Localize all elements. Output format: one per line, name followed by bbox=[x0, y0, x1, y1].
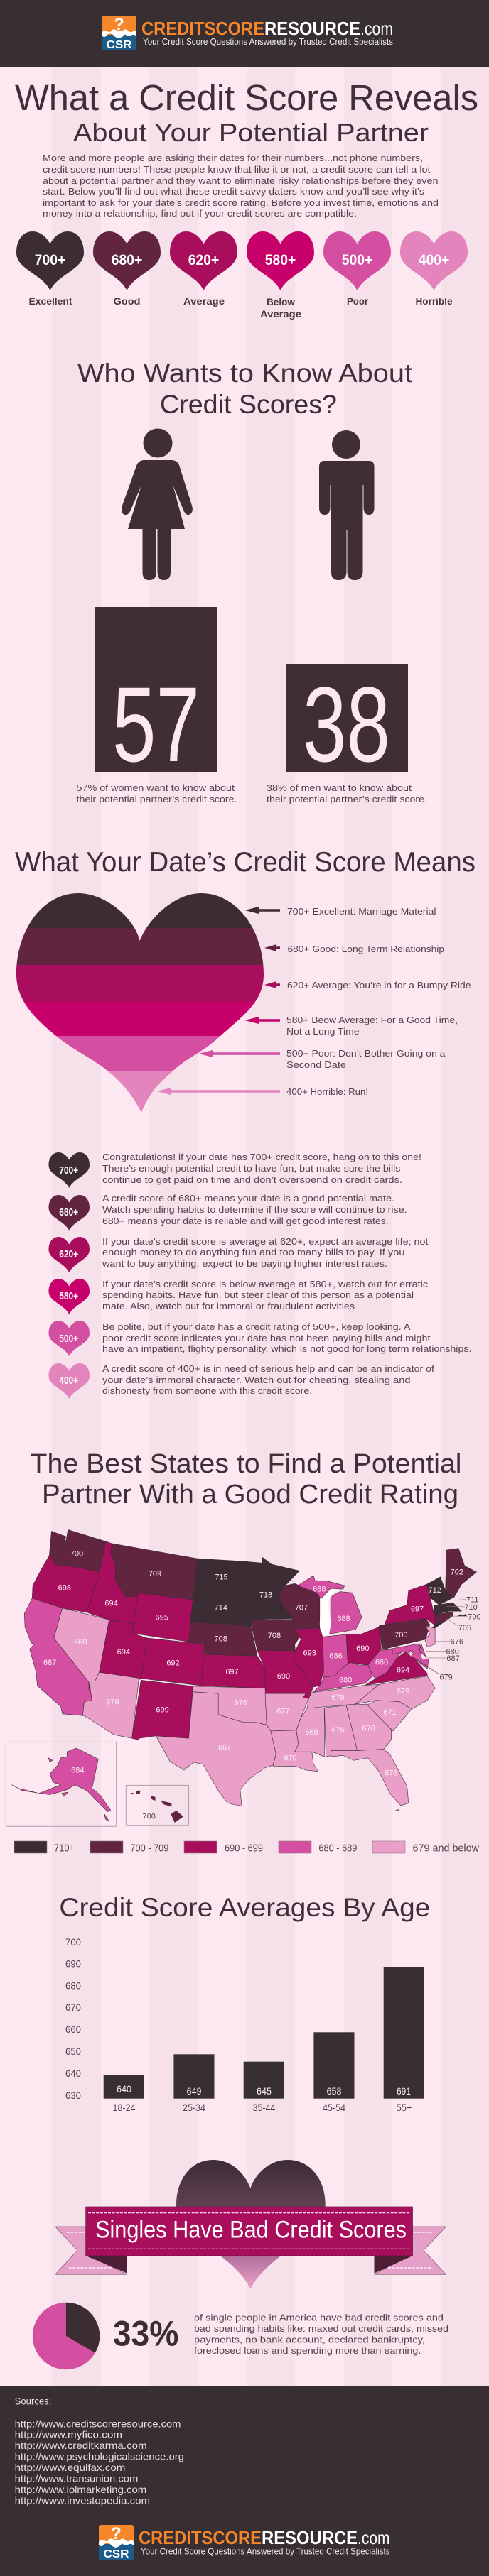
map value labels: 709 bbox=[149, 1570, 161, 1578]
header banner with logo: .com bbox=[360, 18, 393, 39]
map value labels: 700 bbox=[468, 1612, 481, 1621]
age labels: 35-44 bbox=[253, 2102, 276, 2113]
explanation 700+: Congratulations! if your date has 700+ credit score, hang on to this one! bbox=[102, 1152, 421, 1162]
map value labels: 680 bbox=[375, 1658, 388, 1666]
map value labels: 700 bbox=[394, 1631, 407, 1639]
bar values: 649 bbox=[186, 2085, 202, 2097]
map value labels: 676 bbox=[235, 1699, 247, 1708]
heart: 680+ Good: 680+ bbox=[112, 252, 142, 268]
map legend: 680 - 689 bbox=[318, 1842, 357, 1855]
y axis labels: 630 bbox=[65, 2090, 81, 2101]
map value labels: 677 bbox=[276, 1708, 290, 1716]
map value labels: 714 bbox=[215, 1604, 227, 1612]
explanation 580+ bbox=[48, 1279, 429, 1314]
map legend: 690 - 699 bbox=[225, 1842, 263, 1855]
explanation 620+: If your date’s credit score is average at 620+, expect an average life; not bbox=[102, 1236, 429, 1247]
caption: women: their potential partner’s credit score. bbox=[77, 794, 237, 804]
intro text: about a potential partner and they want to eliminate risky relationships before they even bbox=[43, 175, 438, 186]
explanation 700+ bbox=[48, 1152, 421, 1188]
arrow: 400 bbox=[157, 1088, 280, 1095]
map value labels: 708 bbox=[268, 1632, 281, 1640]
map value labels bbox=[43, 1549, 481, 1821]
explanation 680+ bbox=[48, 1193, 407, 1230]
explanation 700+: continue to get paid on time and don’t overspend on credit cards. bbox=[102, 1174, 402, 1185]
explanation 580+: spending habits. Have fun, but steer clear of this person as a potential bbox=[102, 1289, 414, 1300]
map value labels: 688 bbox=[313, 1585, 326, 1593]
age labels: 18-24 bbox=[112, 2102, 136, 2113]
map value labels: 692 bbox=[166, 1659, 180, 1667]
map value labels: 680 bbox=[446, 1647, 459, 1656]
explanation 700+: There’s enough potential credit to have fun, but make sure the bills bbox=[102, 1163, 401, 1174]
intro text: start. Below you’ll find out what these credit savvy daters know and you’ll see why it’s bbox=[43, 186, 425, 197]
ribbon right fold bbox=[374, 2256, 412, 2274]
ribbon left tail bbox=[55, 2227, 127, 2274]
bar: 57 percent women: 57 bbox=[112, 665, 200, 784]
explanation 580+: 580+ bbox=[59, 1291, 78, 1302]
map value labels: 690 bbox=[277, 1672, 290, 1681]
caption: women bbox=[77, 782, 237, 804]
map value labels: 676 bbox=[106, 1698, 119, 1707]
map value labels: 660 bbox=[74, 1638, 87, 1647]
intro text: More and more people are asking their dates for their numbers...not phone numbers, bbox=[43, 153, 423, 163]
age labels: 55+ bbox=[397, 2102, 412, 2113]
bar values: 645 bbox=[257, 2085, 272, 2097]
age labels: 25-34 bbox=[183, 2102, 205, 2113]
sources list: http://www.transunion.com bbox=[15, 2473, 138, 2484]
intro text bbox=[43, 153, 439, 219]
stat text: of single people in America have bad credit scores and bbox=[194, 2312, 444, 2323]
explanation 680+: 680+ bbox=[59, 1207, 78, 1218]
map value labels: 712 bbox=[429, 1586, 441, 1595]
header banner with logo: CSR bbox=[107, 39, 132, 51]
bar chart: scores by age bbox=[65, 1936, 424, 2113]
ribbon stitching bbox=[67, 2213, 432, 2268]
map value labels: 700 bbox=[143, 1812, 156, 1821]
sources list: http://www.creditscoreresource.com bbox=[15, 2418, 181, 2429]
heart legend labels: 680+ Good: Long Term Relationship bbox=[287, 944, 444, 954]
big striped heart bbox=[16, 893, 264, 1113]
score hearts row bbox=[16, 231, 468, 320]
map value labels: 679 bbox=[439, 1673, 453, 1681]
heart legend labels: 400+ Horrible: Run! bbox=[286, 1086, 368, 1097]
footer logo: RESOURCE bbox=[262, 2527, 358, 2548]
icon: woman bbox=[122, 429, 193, 580]
map value labels: 702 bbox=[451, 1568, 463, 1576]
caption: men bbox=[267, 782, 427, 804]
map value labels: 688 bbox=[337, 1615, 350, 1623]
y axis labels: 690 bbox=[65, 1958, 81, 1970]
map value labels: 708 bbox=[215, 1635, 227, 1644]
y axis labels: 680 bbox=[65, 1980, 81, 1992]
heart: 400+ Horrible: Horrible bbox=[415, 295, 453, 307]
explanation 500+: 500+ bbox=[59, 1333, 78, 1345]
map value labels: 694 bbox=[117, 1648, 130, 1657]
explanation 500+: poor credit score indicates your date has not been paying bills and might bbox=[102, 1333, 431, 1343]
heading: averages by age: Credit Score Averages By Age bbox=[59, 1893, 430, 1922]
heart: 620+ Average: 620+ bbox=[188, 252, 219, 268]
explanation 500+: Be polite, but if your date has a credit rating of 500+, keep looking. A bbox=[102, 1321, 411, 1332]
ribbon right tail bbox=[374, 2227, 446, 2274]
map value labels: 715 bbox=[215, 1573, 228, 1582]
sources list: http://www.myfico.com bbox=[15, 2428, 122, 2440]
explanation 400+ bbox=[48, 1363, 434, 1399]
heart: 680+ Good: Good bbox=[114, 295, 141, 307]
bar values: 691 bbox=[397, 2085, 411, 2097]
age labels bbox=[112, 2102, 412, 2113]
y axis labels: 700 bbox=[65, 1936, 81, 1948]
map value labels: 710 bbox=[464, 1603, 478, 1612]
map value labels: 678 bbox=[385, 1769, 397, 1777]
explanation 580+: If your date’s credit score is below average at 580+, watch out for erratic bbox=[102, 1279, 429, 1289]
map value labels: 711 bbox=[466, 1596, 479, 1605]
pie chart: 33 percent bbox=[33, 2303, 100, 2369]
map value labels: 693 bbox=[303, 1649, 316, 1658]
header banner with logo: CREDITSCORE bbox=[141, 18, 264, 39]
y axis labels: 670 bbox=[65, 2002, 81, 2013]
map legend bbox=[14, 1841, 479, 1855]
heart legend labels: 700+ Excellent: Marriage Material bbox=[287, 906, 436, 917]
heart: 620+ Average bbox=[170, 231, 237, 307]
intro text: money into a relationship, find out if your credit scores are compatible. bbox=[43, 208, 357, 219]
map legend: 700 - 709 bbox=[130, 1842, 168, 1855]
map value labels: 679 bbox=[331, 1693, 345, 1702]
caption: men: their potential partner’s credit score. bbox=[267, 794, 427, 804]
ribbon banner bbox=[55, 2207, 446, 2274]
heart: 620+ Average: Average bbox=[183, 295, 225, 307]
map value labels: 686 bbox=[329, 1652, 343, 1660]
heart: 400+ Horrible bbox=[400, 231, 468, 307]
ribbon main band bbox=[86, 2207, 412, 2256]
explanation 700+: 700+ bbox=[59, 1165, 78, 1177]
map value labels: 707 bbox=[295, 1604, 308, 1612]
y axis labels: 640 bbox=[65, 2068, 81, 2079]
map legend: 679 and below bbox=[412, 1842, 479, 1855]
sources list: http://www.psychologicalscience.org bbox=[15, 2451, 184, 2462]
explanation 620+ bbox=[48, 1236, 429, 1272]
map value labels: 687 bbox=[43, 1659, 56, 1667]
ribbon text: Singles Have Bad Credit Scores bbox=[95, 2217, 407, 2244]
map value labels: 690 bbox=[356, 1644, 369, 1653]
gradient heart behind banner bbox=[176, 2160, 326, 2289]
explanation 400+: your date’s immoral character. Watch out for cheating, stealing and bbox=[102, 1375, 411, 1385]
stat text: bad spending habits like: maxed out credit cards, missed bbox=[194, 2323, 448, 2334]
heart legend labels: Second Date bbox=[286, 1059, 346, 1070]
heart: 700+ Excellent bbox=[16, 231, 84, 307]
map value labels: 679 bbox=[397, 1687, 409, 1696]
stat text: payments, no bank account, declared bankruptcy, bbox=[194, 2335, 425, 2345]
map value labels: 684 bbox=[71, 1767, 84, 1775]
heart: 500+ Poor bbox=[323, 231, 391, 307]
explanation 500+: have an impatient, flighty personality, which is not good for long term relationships. bbox=[102, 1343, 472, 1354]
footer logo: .com bbox=[358, 2527, 389, 2548]
heading: best states bbox=[30, 1449, 461, 1510]
explanation 500+ bbox=[48, 1321, 472, 1356]
map value labels: 697 bbox=[225, 1668, 239, 1676]
heart legend labels bbox=[286, 906, 471, 1097]
bars bbox=[104, 1967, 424, 2099]
map value labels: 697 bbox=[411, 1605, 424, 1614]
map value labels: 676 bbox=[331, 1726, 345, 1735]
header banner with logo: RESOURCE bbox=[264, 18, 360, 39]
map value labels: 671 bbox=[383, 1708, 397, 1717]
age labels: 45-54 bbox=[323, 2102, 345, 2113]
heart legend labels: 620+ Average: You’re in for a Bumpy Ride bbox=[287, 980, 471, 990]
US map bbox=[6, 1529, 481, 1826]
arrow: 580 bbox=[244, 1017, 280, 1024]
map value labels: 670 bbox=[362, 1724, 375, 1732]
title bbox=[15, 77, 478, 147]
stat text: foreclosed loans and spending more than earning. bbox=[194, 2345, 421, 2356]
footer logo bbox=[99, 2524, 390, 2560]
heart: 700+ Excellent: Excellent bbox=[28, 295, 72, 307]
bar: 38 percent men: 38 bbox=[303, 665, 390, 784]
map value labels: 687 bbox=[446, 1654, 460, 1663]
arrow: 700 bbox=[244, 907, 280, 914]
heading: who wants to know: Who Wants to Know About bbox=[77, 359, 413, 388]
caption: men: 38% of men want to know about bbox=[267, 782, 412, 793]
heading: what your date's score means: What Your Date’s Credit Score Means bbox=[15, 847, 475, 878]
heart: 580+ Below Average bbox=[247, 231, 314, 320]
icon: man bbox=[319, 430, 374, 580]
heart: 580+ Below Average: Average bbox=[260, 308, 301, 320]
heart: 500+ Poor: 500+ bbox=[342, 252, 372, 268]
explanation 680+: 680+ means your date is reliable and will get good interest rates. bbox=[102, 1216, 389, 1226]
intro text: important to ask for your date’s credit score rating. Before you invest time, emotions and bbox=[43, 197, 439, 208]
sources list: http://www.equifax.com bbox=[15, 2462, 125, 2473]
explanation 620+: enough money to do anything fun and too many bills to pay. If you bbox=[102, 1247, 405, 1257]
footer panel bbox=[0, 2386, 489, 2576]
arrow: 680 bbox=[264, 944, 280, 951]
map value labels: 670 bbox=[284, 1754, 297, 1762]
heart: 580+ Below Average: Below bbox=[267, 296, 295, 307]
footer logo: CREDITSCORE bbox=[139, 2527, 262, 2548]
y axis labels: 650 bbox=[65, 2046, 81, 2057]
explanation 580+: mate. Also, watch out for immoral or fraudulent activities bbox=[102, 1301, 355, 1311]
explanation 680+: A credit score of 680+ means your date is a good potential mate. bbox=[102, 1193, 394, 1204]
heading: who wants to know bbox=[77, 359, 413, 419]
sources list bbox=[15, 2396, 184, 2506]
heart: 580+ Below Average: 580+ bbox=[265, 252, 296, 268]
heart: 680+ Good bbox=[93, 231, 161, 307]
footer logo: ? bbox=[111, 2524, 122, 2543]
heart: 400+ Horrible: 400+ bbox=[419, 252, 449, 268]
intro text: credit score numbers! These people know that like it or not, a credit score can tell a lot bbox=[43, 164, 431, 175]
heart: 700+ Excellent: 700+ bbox=[35, 252, 65, 268]
heart: 500+ Poor: Poor bbox=[347, 295, 369, 307]
bar: 57 percent women bbox=[95, 607, 217, 784]
title: About Your Potential Partner bbox=[73, 118, 429, 147]
footer logo: Your Credit Score Questions Answered by Trusted Credit Specialists bbox=[141, 2545, 390, 2556]
title: What a Credit Score Reveals bbox=[15, 77, 478, 118]
arrow: 500 bbox=[199, 1050, 280, 1057]
heading: who wants to know: Credit Scores? bbox=[160, 390, 337, 419]
arrow: 620 bbox=[264, 981, 280, 988]
map value labels: 695 bbox=[156, 1613, 168, 1622]
heading: best states: The Best States to Find a Potential bbox=[30, 1449, 461, 1479]
map value labels: 680 bbox=[339, 1676, 352, 1684]
map legend: 710+ bbox=[54, 1842, 75, 1855]
footer logo: CSR bbox=[104, 2548, 129, 2560]
map value labels: 699 bbox=[156, 1706, 169, 1715]
map value labels: 700 bbox=[70, 1549, 83, 1558]
map value labels: 694 bbox=[104, 1599, 118, 1608]
heart legend labels: 500+ Poor: Don’t Bother Going on a bbox=[286, 1048, 446, 1059]
stat text bbox=[194, 2312, 448, 2356]
sources list: http://www.investopedia.com bbox=[15, 2495, 150, 2506]
explanation 400+: 400+ bbox=[59, 1375, 78, 1387]
map value labels: 718 bbox=[259, 1590, 272, 1599]
y axis labels bbox=[65, 1936, 81, 2101]
explanation 400+: A credit score of 400+ is in need of serious help and can be an indicator of bbox=[102, 1363, 434, 1374]
map value labels: 698 bbox=[58, 1583, 71, 1592]
sources list: Sources: bbox=[15, 2396, 51, 2407]
map value labels: 668 bbox=[305, 1728, 318, 1737]
bar values bbox=[117, 2083, 411, 2097]
header banner with logo: ? bbox=[114, 15, 124, 34]
explanation 680+: Watch spending habits to determine if the score will continue to rise. bbox=[102, 1204, 407, 1215]
explanation 620+: want to buy anything, expect to be paying higher interest rates. bbox=[102, 1258, 387, 1269]
header banner with logo bbox=[0, 0, 489, 67]
header banner with logo: Your Credit Score Questions Answered by Trusted Credit Specialists bbox=[143, 36, 393, 47]
heart legend labels: 580+ Beow Average: For a Good Time, bbox=[286, 1015, 458, 1025]
sources list: http://www.creditkarma.com bbox=[15, 2440, 147, 2451]
caption: women: 57% of women want to know about bbox=[77, 782, 235, 793]
bar values: 640 bbox=[117, 2083, 131, 2095]
map value labels: 676 bbox=[451, 1637, 463, 1646]
explanation 400+: dishonesty from someone with this credit score. bbox=[102, 1385, 312, 1396]
map value labels: 694 bbox=[397, 1666, 409, 1674]
ribbon left fold bbox=[86, 2256, 127, 2274]
explanation 620+: 620+ bbox=[59, 1249, 78, 1260]
stat: 33%: 33% bbox=[113, 2313, 178, 2353]
map value labels: 667 bbox=[218, 1744, 231, 1752]
heading: best states: Partner With a Good Credit Rating bbox=[42, 1480, 458, 1510]
bar values: 658 bbox=[327, 2085, 342, 2097]
y axis labels: 660 bbox=[65, 2024, 81, 2035]
heart legend labels: Not a Long Time bbox=[286, 1026, 360, 1037]
map value labels: 705 bbox=[458, 1624, 471, 1632]
sources list: http://www.iolmarketing.com bbox=[15, 2484, 146, 2495]
